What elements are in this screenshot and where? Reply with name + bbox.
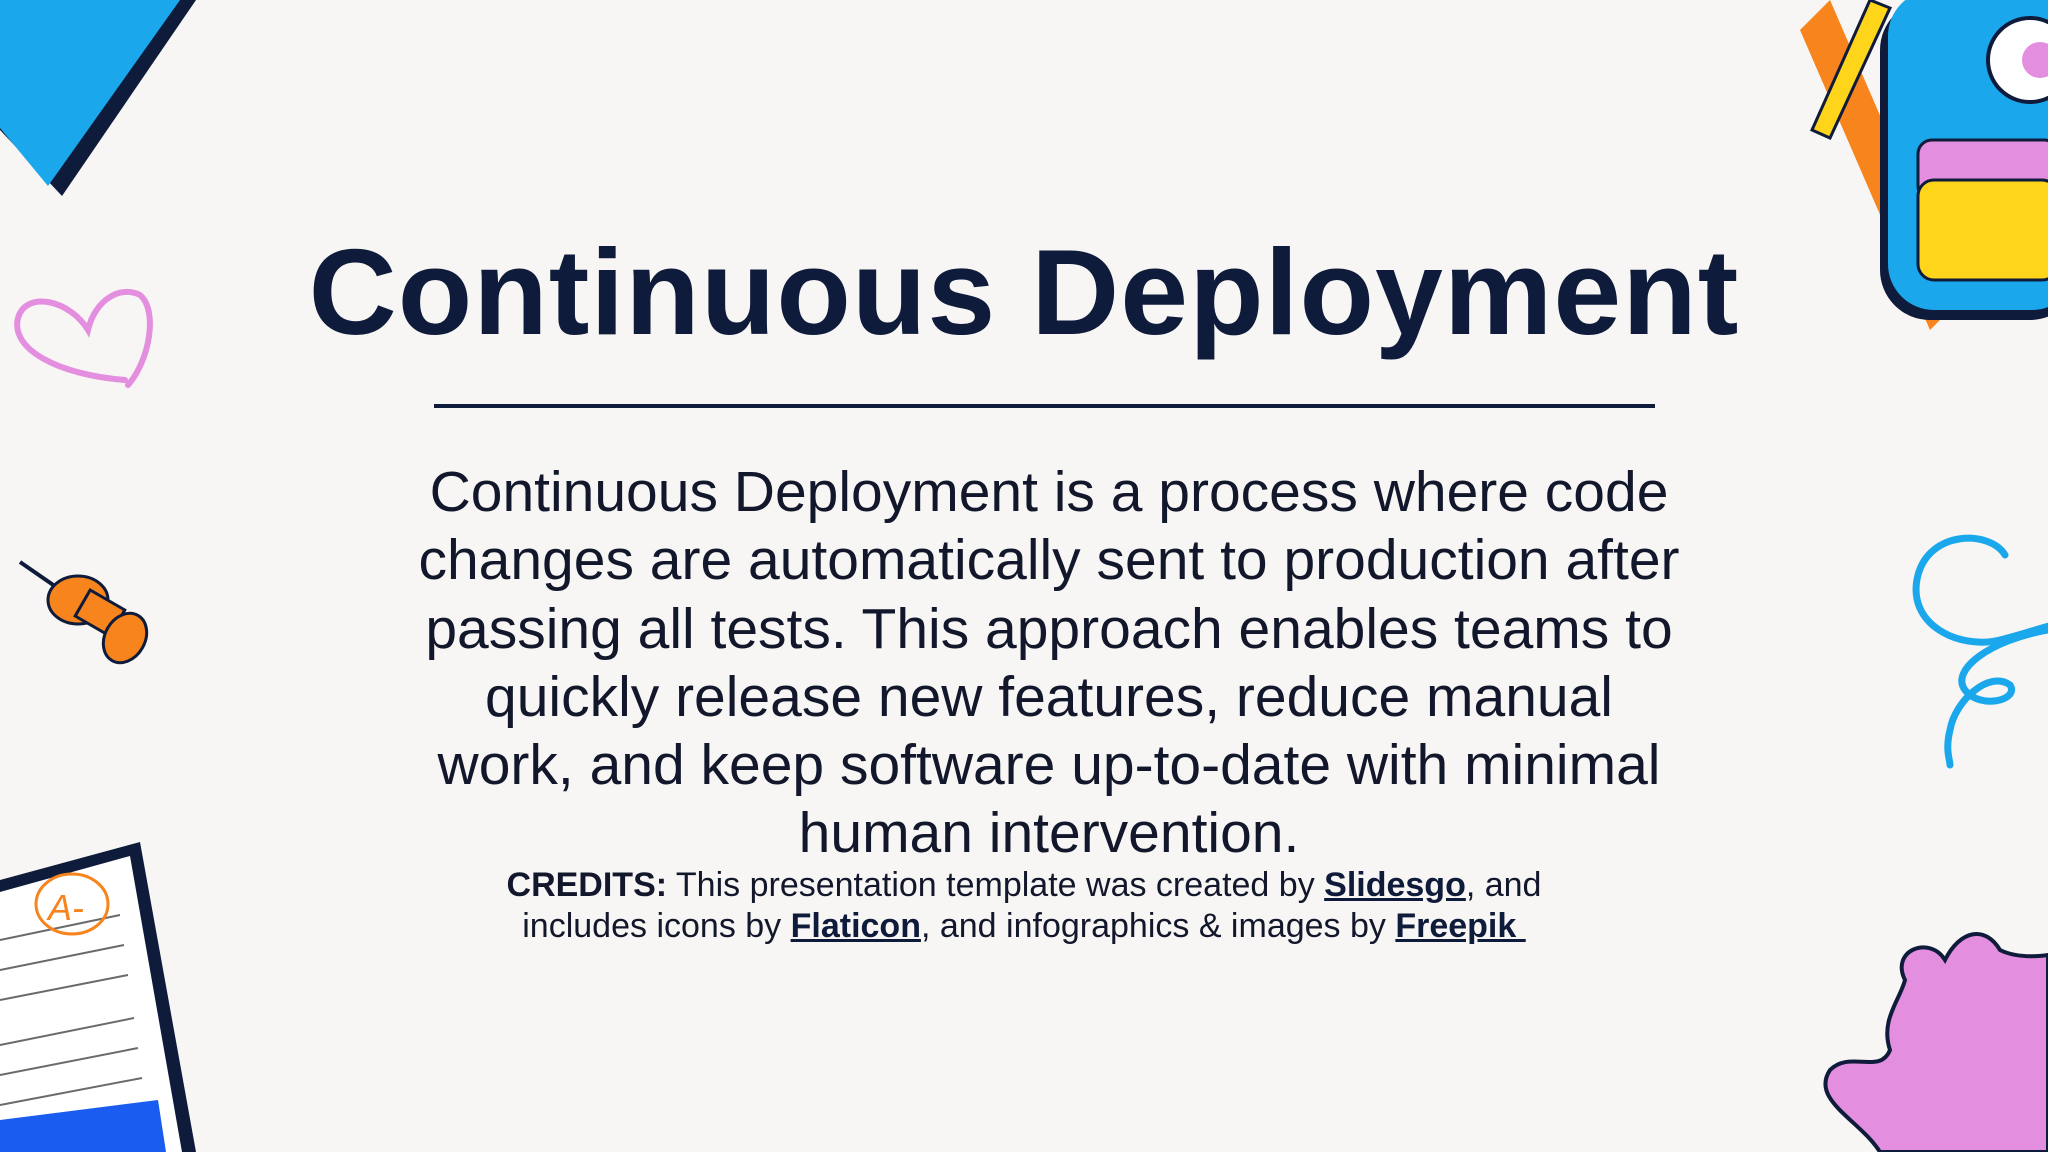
icon: blue swirl bbox=[1916, 538, 2048, 765]
icon: pink splat bbox=[1825, 934, 2048, 1152]
text block: description: passing all tests. This approach enables teams to bbox=[425, 597, 1673, 661]
icon: pink heart bbox=[17, 292, 150, 385]
text block: credits: includes icons by Flaticon, and infographics & images by Freepik bbox=[522, 907, 1516, 945]
icon: graded paper bbox=[0, 842, 196, 1152]
icon: backpack top-right bbox=[1800, 0, 2048, 330]
icon: blue book top-left bbox=[0, 0, 196, 196]
text block: description: work, and keep software up-to-date with minimal bbox=[438, 733, 1660, 797]
text block: description: Continuous Deployment is a process where code bbox=[430, 460, 1668, 524]
text block: description: changes are automatically sent to production after bbox=[418, 528, 1680, 592]
text block: description bbox=[418, 460, 1680, 865]
text block: credits: CREDITS: This presentation template was created by Slidesgo, and bbox=[507, 866, 1541, 904]
icon: graded paper: A- bbox=[46, 887, 84, 928]
icon: pushpin bbox=[20, 562, 155, 671]
text block: description: human intervention. bbox=[799, 801, 1299, 865]
text block: description: quickly release new features, reduce manual bbox=[485, 665, 1613, 729]
text block: credits bbox=[507, 866, 1541, 945]
title: Continuous Deployment bbox=[309, 224, 1739, 360]
